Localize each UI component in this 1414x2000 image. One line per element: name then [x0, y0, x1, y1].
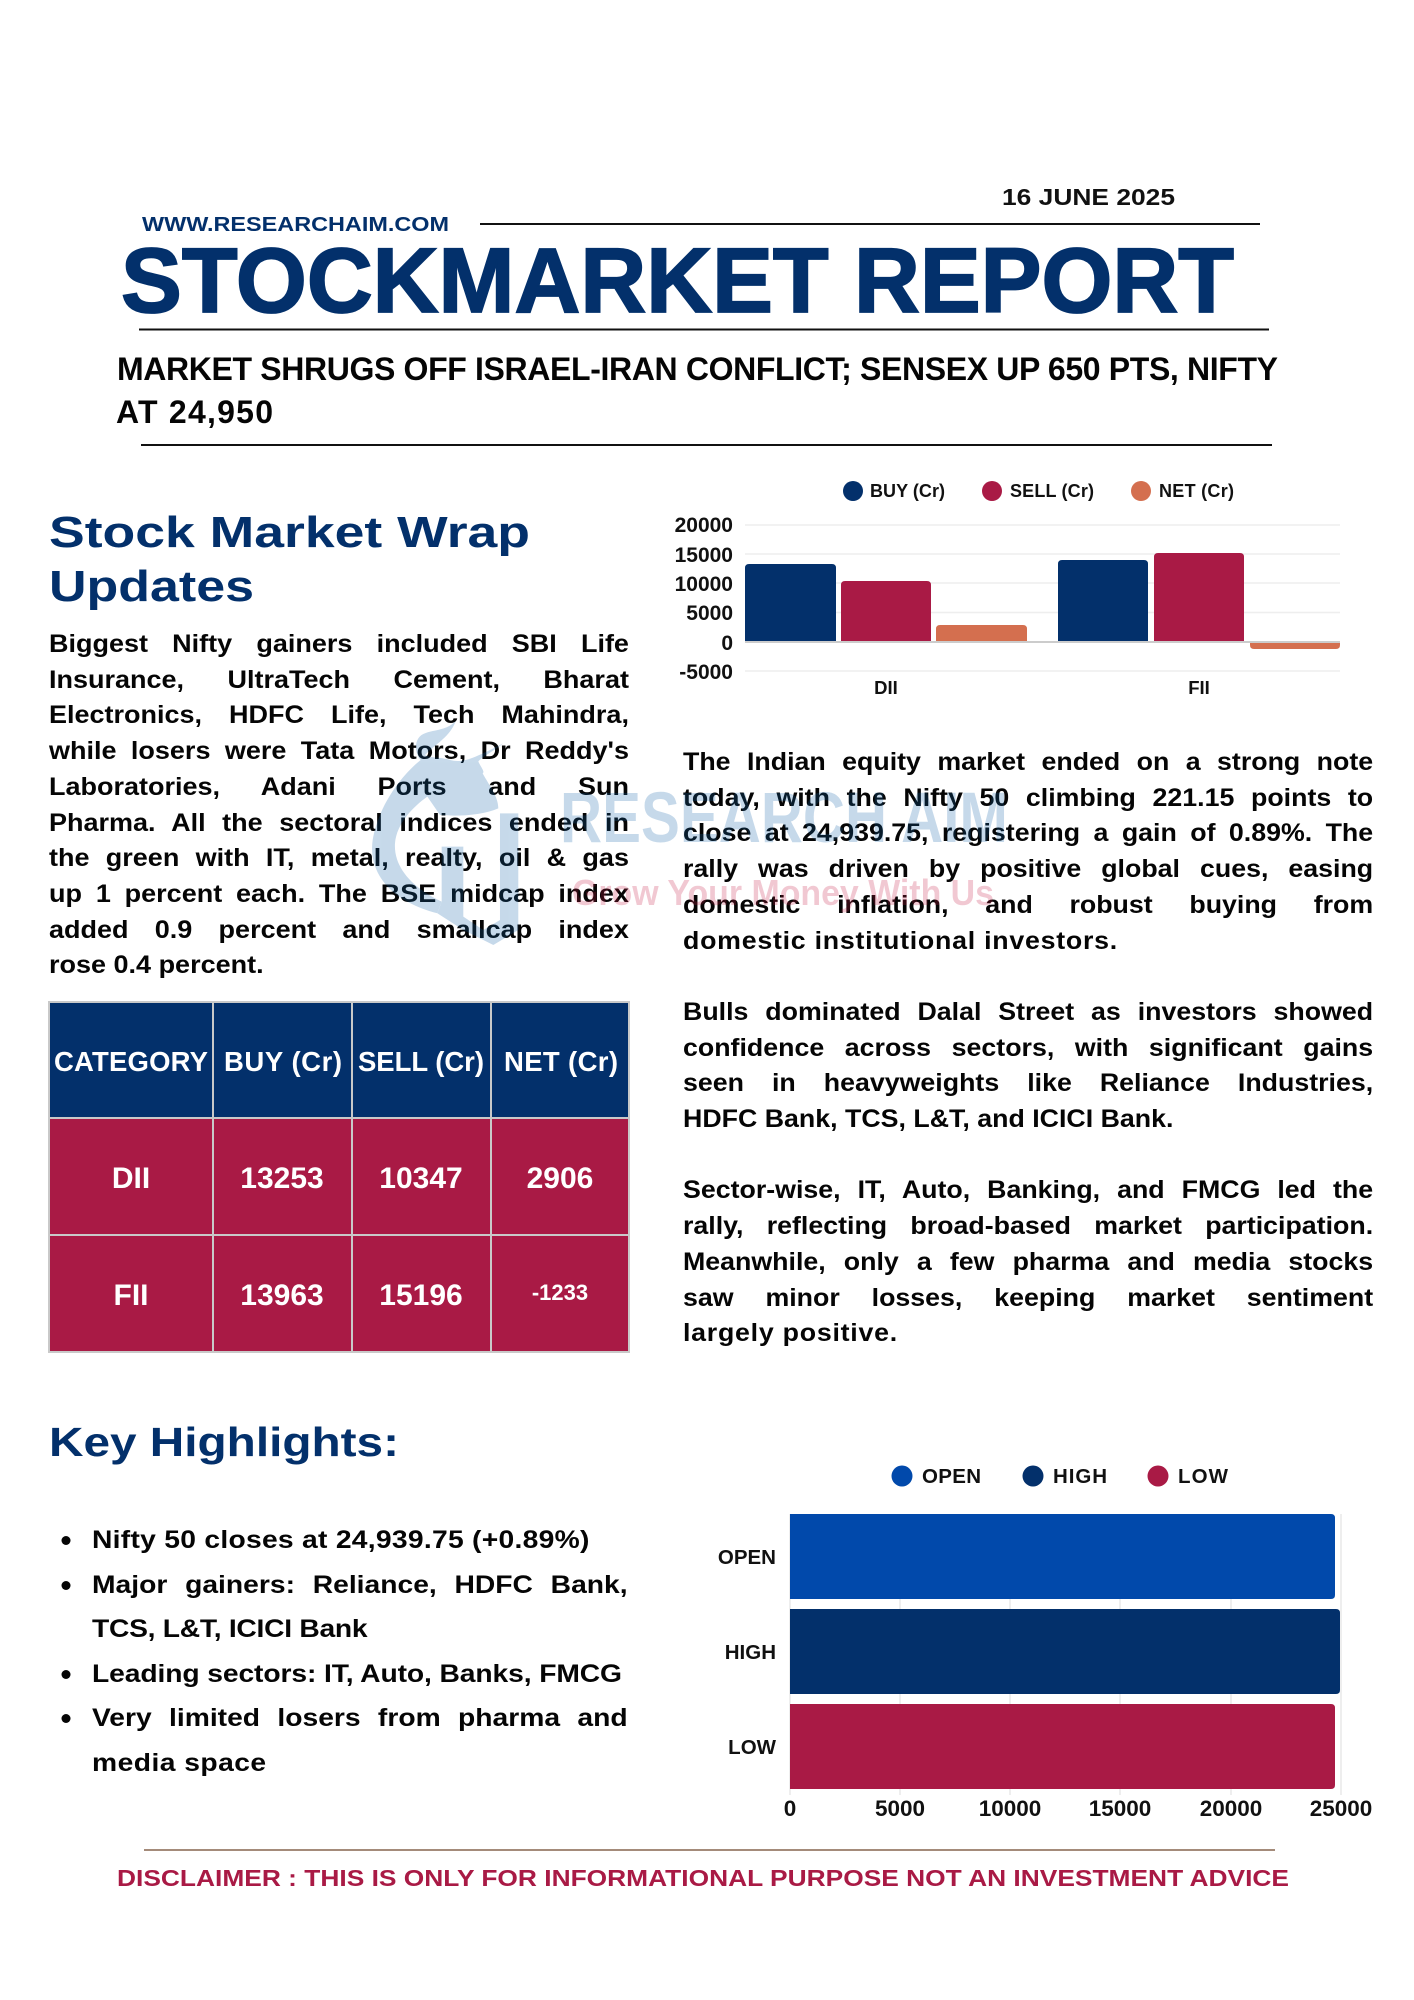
text block: stock market wrap [49, 630, 629, 979]
text block: market summary [683, 748, 1373, 1347]
text block: stock market wrap: the green with IT, metal, realty, oil & gas [49, 844, 629, 872]
bullet list: key highlights: media space [92, 1749, 267, 1777]
headline: AT 24,950 [116, 394, 273, 430]
bar chart: DII and FII buy sell net [675, 481, 1340, 698]
chart legend: OPEN [922, 1465, 981, 1488]
watermark tagline: Grow Your Money With Us [572, 872, 994, 913]
bullet list: key highlights: TCS, L&T, ICICI Bank [92, 1615, 367, 1643]
category labels: HIGH [725, 1641, 776, 1664]
DII bars [745, 564, 1027, 642]
table header row: SELL (Cr) [358, 1046, 484, 1077]
x axis labels: 0 [784, 1796, 796, 1821]
table header row: CATEGORY [54, 1046, 208, 1077]
text block: stock market wrap: up 1 percent each. The BSE midcap index [49, 880, 629, 908]
table header row [54, 1046, 618, 1077]
bar chart: open high low [718, 1465, 1372, 1821]
chart legend: SELL (Cr) [1010, 481, 1094, 501]
y axis labels: 15000 [675, 544, 733, 567]
bullet list: key highlights: Very limited losers from pharma and [92, 1704, 628, 1732]
text block: market summary: HDFC Bank, TCS, L&T, and ICICI Bank. [683, 1105, 1173, 1133]
bullet list: key highlights: Leading sectors: IT, Auto, Banks, FMCG [92, 1660, 622, 1688]
chart legend [843, 481, 1234, 501]
text block: stock market wrap: Insurance, UltraTech Cement, Bharat [49, 666, 629, 694]
watermark: research aim logo and tagline [372, 721, 1008, 945]
x axis labels: 20000 [1200, 1796, 1262, 1821]
bullet list: key highlights [62, 1526, 628, 1777]
heading: stock market wrap updates: Stock Market Wrap [49, 508, 530, 557]
bullet list: key highlights: Nifty 50 closes at 24,939.75 (+0.89%) [92, 1526, 590, 1554]
x axis labels: 15000 [1089, 1796, 1151, 1821]
text block: stock market wrap: while losers were Tata Motors, Dr Reddy's [49, 737, 629, 765]
table row: DII: 13253 [240, 1162, 324, 1195]
text block: stock market wrap: Laboratories, Adani Ports and Sun [49, 773, 629, 801]
bar: high [790, 1609, 1340, 1694]
table row: FII: 13963 [240, 1279, 324, 1312]
y axis labels: -5000 [679, 661, 733, 684]
table row: FII: FII [114, 1279, 148, 1312]
text block: stock market wrap: added 0.9 percent and smallcap index [49, 916, 629, 944]
text block: market summary: domestic institutional investors. [683, 927, 1118, 955]
FII bars [1058, 553, 1340, 649]
chart legend: NET (Cr) [1159, 481, 1234, 501]
bar: open [790, 1514, 1335, 1599]
text block: market summary: close at 24,939.75, registering a gain of 0.89%. The [683, 819, 1373, 847]
y axis labels [675, 514, 733, 684]
bullet list: key highlights: Major gainers: Reliance, HDFC Bank, [92, 1571, 628, 1599]
headline: MARKET SHRUGS OFF ISRAEL-IRAN CONFLICT; SENSEX UP 650 PTS, NIFTY [117, 351, 1278, 387]
y axis labels: 0 [721, 632, 733, 655]
text block: stock market wrap: rose 0.4 percent. [49, 951, 264, 979]
chart legend [892, 1465, 1229, 1488]
text block: market summary: today, with the Nifty 50 climbing 221.15 points to [683, 784, 1373, 812]
date: 16 JUNE 2025 [1002, 184, 1175, 210]
category labels [718, 1546, 777, 1759]
heading: stock market wrap updates: Updates [49, 562, 254, 611]
x axis labels: 25000 [1310, 1796, 1372, 1821]
text block: market summary: Meanwhile, only a few pharma and media stocks [683, 1248, 1373, 1276]
text block: market summary: rally was driven by positive global cues, easing [683, 855, 1373, 883]
table header row: BUY (Cr) [224, 1046, 342, 1077]
table row: FII: 15196 [379, 1279, 463, 1312]
watermark name: RESEARCH AIM [560, 779, 1008, 858]
text block: market summary: The Indian equity market ended on a strong note [683, 748, 1373, 776]
text block: market summary: confidence across sectors, with significant gains [683, 1034, 1373, 1062]
disclaimer: DISCLAIMER : THIS IS ONLY FOR INFORMATIONAL PURPOSE NOT AN INVESTMENT ADVICE [117, 1865, 1289, 1891]
text block: market summary: largely positive. [683, 1319, 898, 1347]
bar: low [790, 1704, 1335, 1789]
x axis labels: DII [874, 677, 898, 698]
chart legend: HIGH [1053, 1465, 1107, 1488]
table row: FII: -1233 [532, 1280, 588, 1305]
x axis labels: FII [1188, 677, 1210, 698]
x axis labels: 5000 [875, 1796, 925, 1821]
text block: market summary: seen in heavyweights like Reliance Industries, [683, 1069, 1373, 1097]
text block: market summary: domestic inflation, and robust buying from [683, 891, 1373, 919]
icon: bull logo [372, 721, 518, 945]
y axis labels: 20000 [675, 514, 733, 537]
text block: stock market wrap: Pharma. All the sectoral indices ended in [49, 809, 629, 837]
text block: market summary: Bulls dominated Dalal Street as investors showed [683, 998, 1373, 1026]
headline [116, 351, 1278, 430]
category labels: LOW [728, 1736, 777, 1759]
heading: key highlights: Key Highlights: [49, 1419, 399, 1465]
text block: stock market wrap: Biggest Nifty gainers included SBI Life [49, 630, 629, 658]
text block: market summary: Sector-wise, IT, Auto, Banking, and FMCG led the [683, 1176, 1373, 1204]
table row: DII: DII [112, 1162, 150, 1195]
table row: DII: 2906 [527, 1162, 593, 1195]
x axis labels [874, 677, 1210, 698]
category labels: OPEN [718, 1546, 776, 1569]
text block: stock market wrap: Electronics, HDFC Life, Tech Mahindra, [49, 701, 629, 729]
heading: stock market wrap updates [49, 508, 530, 611]
website url: WWW.RESEARCHAIM.COM [142, 214, 449, 236]
text block: market summary: saw minor losses, keeping market sentiment [683, 1284, 1373, 1312]
y axis labels: 5000 [686, 602, 733, 625]
y axis labels: 10000 [675, 573, 733, 596]
text block: market summary: rally, reflecting broad-based market participation. [683, 1212, 1373, 1240]
table row: DII: 10347 [379, 1162, 463, 1195]
table row: DII [112, 1162, 593, 1195]
table: FII DII data [49, 1002, 629, 1352]
x axis labels: 10000 [979, 1796, 1041, 1821]
table row: FII [114, 1279, 588, 1312]
title: STOCKMARKET REPORT [121, 230, 1234, 332]
x axis labels [784, 1796, 1372, 1821]
table header row: NET (Cr) [504, 1046, 618, 1077]
chart legend: BUY (Cr) [870, 481, 945, 501]
chart legend: LOW [1178, 1465, 1229, 1488]
